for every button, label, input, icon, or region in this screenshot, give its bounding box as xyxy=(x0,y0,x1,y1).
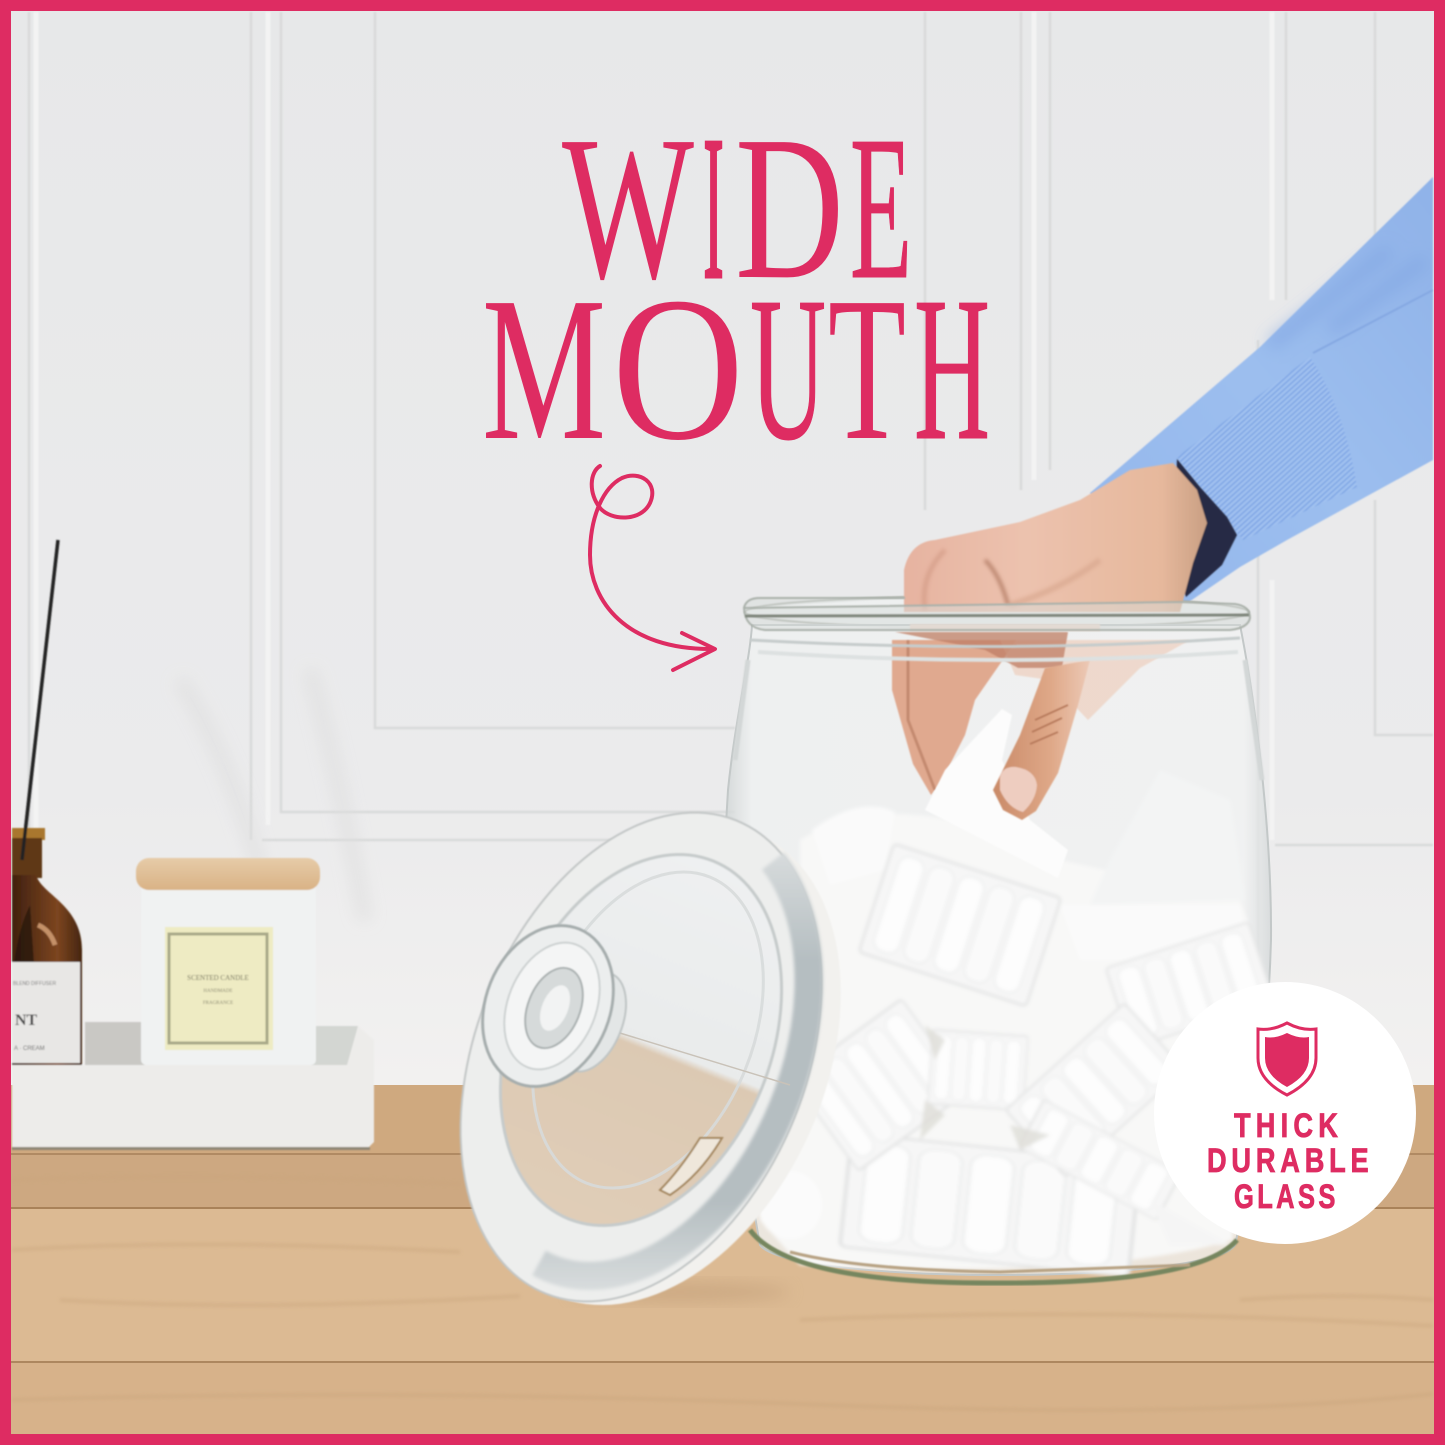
candle jar: HANDMADE xyxy=(203,989,233,994)
arrow: curly arrow pointing to jar mouth xyxy=(590,466,715,670)
candle jar: FRAGRANCE xyxy=(203,1001,233,1006)
plant shadow on wall xyxy=(180,670,365,920)
jar back rim xyxy=(745,596,1249,628)
cotton fill xyxy=(758,770,1274,1277)
cotton pad held by fingers xyxy=(925,709,1068,878)
lid inner dome xyxy=(448,812,834,1268)
lid glass disc xyxy=(392,759,890,1355)
diffuser bottle: NT xyxy=(15,1012,38,1029)
reflected fingers inside jar xyxy=(892,624,1190,795)
tray xyxy=(12,1022,374,1150)
candle wooden lid xyxy=(136,858,320,890)
frosted lid edge xyxy=(402,767,912,1363)
glass lid xyxy=(392,759,912,1363)
badge text: DURABLE xyxy=(1207,1141,1373,1180)
candle label xyxy=(165,927,273,1050)
dark ring of glass xyxy=(539,861,809,1276)
title: wide mouth: W xyxy=(562,93,694,322)
lifestyle props: tray, candle, diffuser xyxy=(12,540,374,1150)
jar base xyxy=(750,1230,1237,1283)
title: wide mouth xyxy=(482,93,990,483)
title: wide mouth: U xyxy=(750,254,826,483)
jar body xyxy=(725,625,1271,1275)
ribbed cuff xyxy=(1177,357,1357,540)
title: wide mouth: D xyxy=(735,93,844,322)
hand above the rim xyxy=(904,459,1237,612)
candle jar: SCENTED CANDLE xyxy=(187,974,249,982)
diffuser bottle: A · CREAM xyxy=(14,1046,45,1052)
title: wide mouth: M xyxy=(482,254,606,483)
wall panel mouldings xyxy=(29,12,1433,1060)
lid knob xyxy=(459,906,639,1106)
wide-mouth glass jar xyxy=(725,598,1274,1283)
cuff shadow xyxy=(1172,459,1237,597)
reed xyxy=(22,540,58,860)
icon: shield xyxy=(1258,1023,1316,1095)
title: wide mouth: T xyxy=(828,254,906,483)
badge text: GLASS xyxy=(1234,1179,1339,1216)
lid shadow on table xyxy=(570,1282,790,1302)
title: wide mouth: O xyxy=(612,254,744,483)
title: wide mouth: H xyxy=(914,254,990,483)
badge text xyxy=(1207,1106,1373,1216)
callout badge: thick durable glass xyxy=(1154,982,1416,1244)
diffuser bottle: BLEND DIFFUSER xyxy=(13,981,56,987)
thumb xyxy=(993,660,1090,820)
badge text: THICK xyxy=(1234,1106,1343,1145)
candle jar xyxy=(136,858,320,1065)
forearm in blue sweater xyxy=(1090,177,1433,606)
title: wide mouth: I xyxy=(703,93,724,322)
diffuser bottle xyxy=(12,540,82,1065)
wooden tabletop xyxy=(0,1085,1445,1445)
title: wide mouth: E xyxy=(850,93,912,322)
jar rim xyxy=(735,598,1262,780)
